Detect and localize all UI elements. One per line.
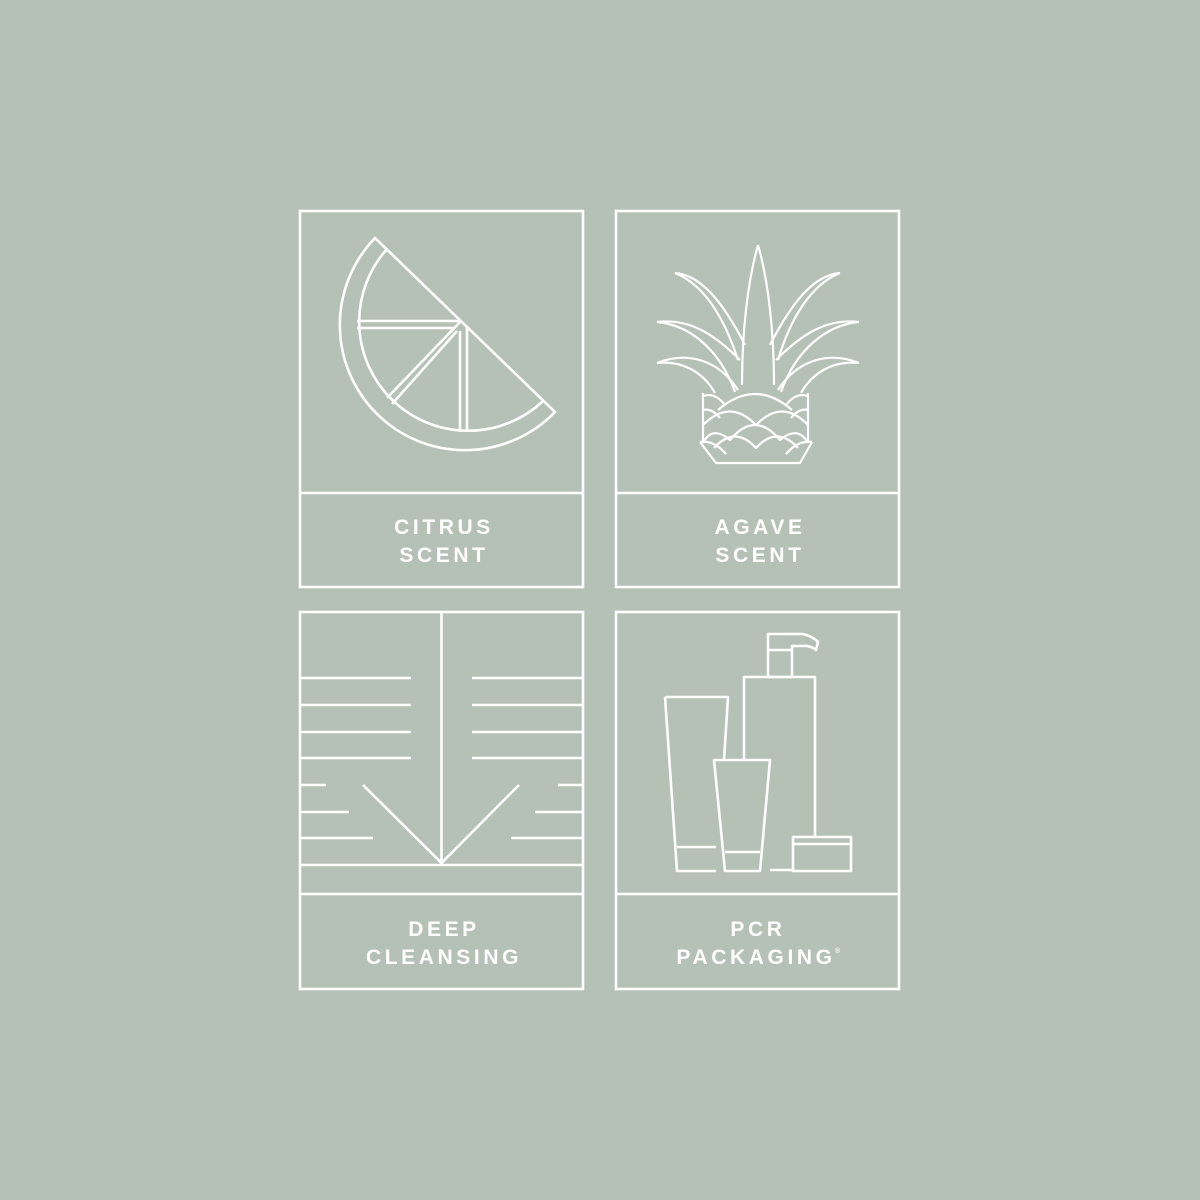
label: agave scent: AGAVE	[714, 516, 806, 539]
icon: bottles	[665, 634, 851, 871]
label: agave scent	[714, 516, 806, 567]
panel: deep cleansing	[300, 612, 583, 989]
label: pcr packaging: PACKAGING	[676, 946, 836, 969]
label: citrus scent	[394, 516, 494, 567]
label: pcr packaging: ®	[835, 947, 841, 955]
label: pcr packaging: PCR	[730, 918, 786, 941]
label: citrus scent: SCENT	[399, 544, 489, 567]
panel: citrus scent	[300, 211, 583, 587]
icon: deep cleansing diagram	[300, 612, 583, 865]
panel: agave scent	[616, 211, 899, 587]
icon: citrus slice	[340, 238, 555, 450]
label: deep cleansing: DEEP	[408, 918, 480, 941]
label: deep cleansing: CLEANSING	[366, 946, 522, 969]
panel: pcr packaging	[616, 612, 899, 989]
label: agave scent: SCENT	[715, 544, 805, 567]
label: citrus scent: CITRUS	[394, 516, 494, 539]
label: deep cleansing	[366, 918, 522, 969]
icon: agave plant	[657, 245, 859, 463]
label: pcr packaging	[676, 918, 841, 969]
